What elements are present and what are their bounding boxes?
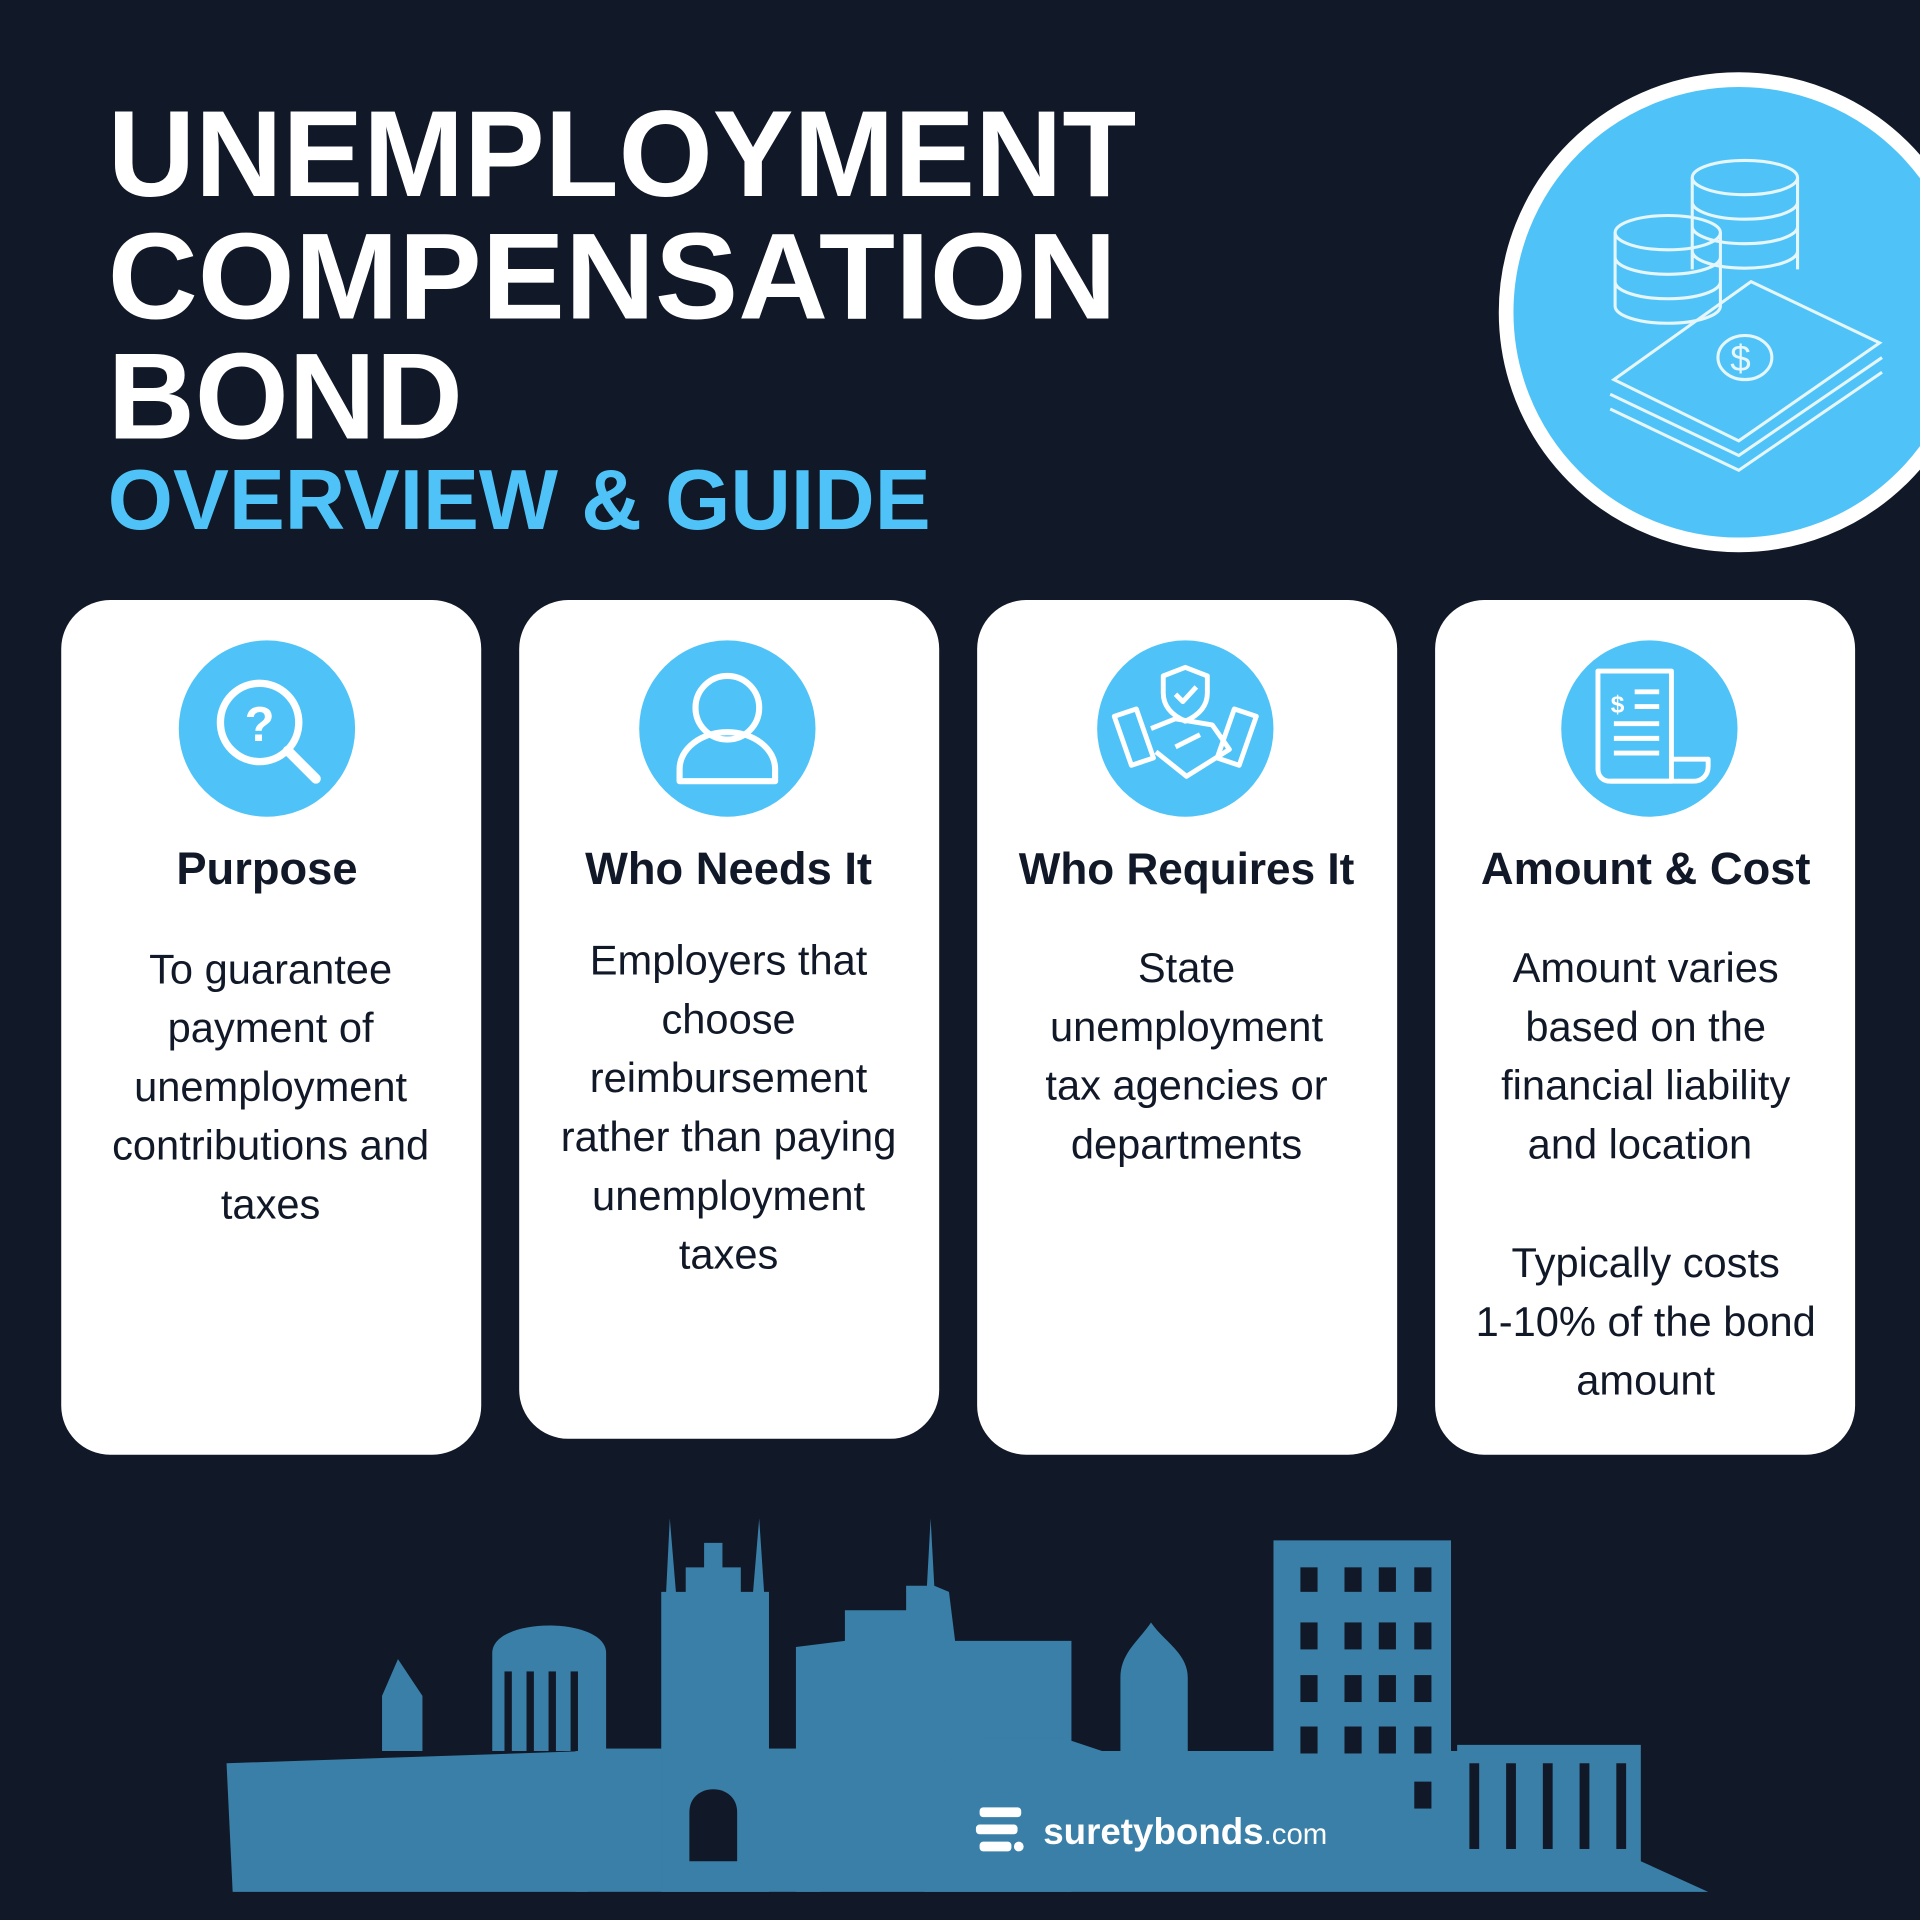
text: who needs it body: rather than paying	[561, 1113, 896, 1160]
icon: person	[639, 640, 816, 817]
skyline illustration	[227, 1518, 1708, 1892]
text: purpose body: payment of	[168, 1004, 374, 1051]
panel: who needs it	[519, 600, 939, 1439]
icon: receipt	[1561, 640, 1738, 817]
icon: coins and money circle	[1506, 80, 1920, 545]
text: who needs it body: reimbursement	[590, 1054, 868, 1101]
text: who requires it body: tax agencies or	[1045, 1062, 1328, 1109]
text: amount body: 1-10% of the bond	[1476, 1298, 1816, 1345]
text: purpose body: contributions and	[112, 1122, 429, 1169]
text: purpose body: taxes	[221, 1180, 320, 1227]
panel: purpose	[61, 600, 481, 1455]
icon: handshake shield	[1097, 640, 1273, 817]
heading: who needs it: Who Needs It	[585, 843, 872, 894]
text: purpose body: unemployment	[134, 1063, 408, 1110]
text: who needs it body: unemployment	[592, 1172, 866, 1219]
title: COMPENSATION	[108, 207, 1117, 344]
title	[108, 85, 1136, 464]
text: purpose body: To guarantee	[149, 945, 392, 992]
text: amount body: and location	[1528, 1120, 1752, 1167]
text: who needs it body: taxes	[679, 1231, 778, 1278]
icon: receipt: $	[1611, 692, 1625, 719]
icon: magnifier question	[179, 640, 355, 817]
text: who requires it body: departments	[1071, 1120, 1302, 1167]
text: who requires it body: unemployment	[1050, 1003, 1323, 1050]
heading: purpose: Purpose	[176, 843, 358, 894]
heading: amount and cost: Amount & Cost	[1481, 843, 1811, 894]
text: who requires it body: State	[1138, 944, 1235, 991]
heading: who requires it: Who Requires It	[1019, 845, 1355, 894]
skyline details	[504, 1567, 1626, 1861]
icon: magnifier question: ?	[245, 698, 275, 752]
text: amount body: Amount varies	[1513, 944, 1779, 991]
title: UNEMPLOYMENT	[108, 85, 1136, 222]
panel: who requires it	[977, 600, 1397, 1455]
subtitle: OVERVIEW & GUIDE	[108, 452, 931, 548]
text: amount body: based on the	[1525, 1003, 1766, 1050]
text: who needs it body: Employers that	[590, 937, 868, 984]
text: amount body: amount	[1576, 1357, 1716, 1404]
text: amount body: financial liability	[1501, 1062, 1791, 1109]
logo: suretybonds.com: suretybonds.com	[1043, 1811, 1327, 1852]
text: amount body: Typically costs	[1512, 1239, 1780, 1286]
title: BOND	[108, 327, 463, 464]
text: who needs it body: choose	[661, 995, 796, 1042]
panel: amount and cost	[1435, 600, 1855, 1455]
icon: coins and money circle: $	[1730, 338, 1751, 379]
